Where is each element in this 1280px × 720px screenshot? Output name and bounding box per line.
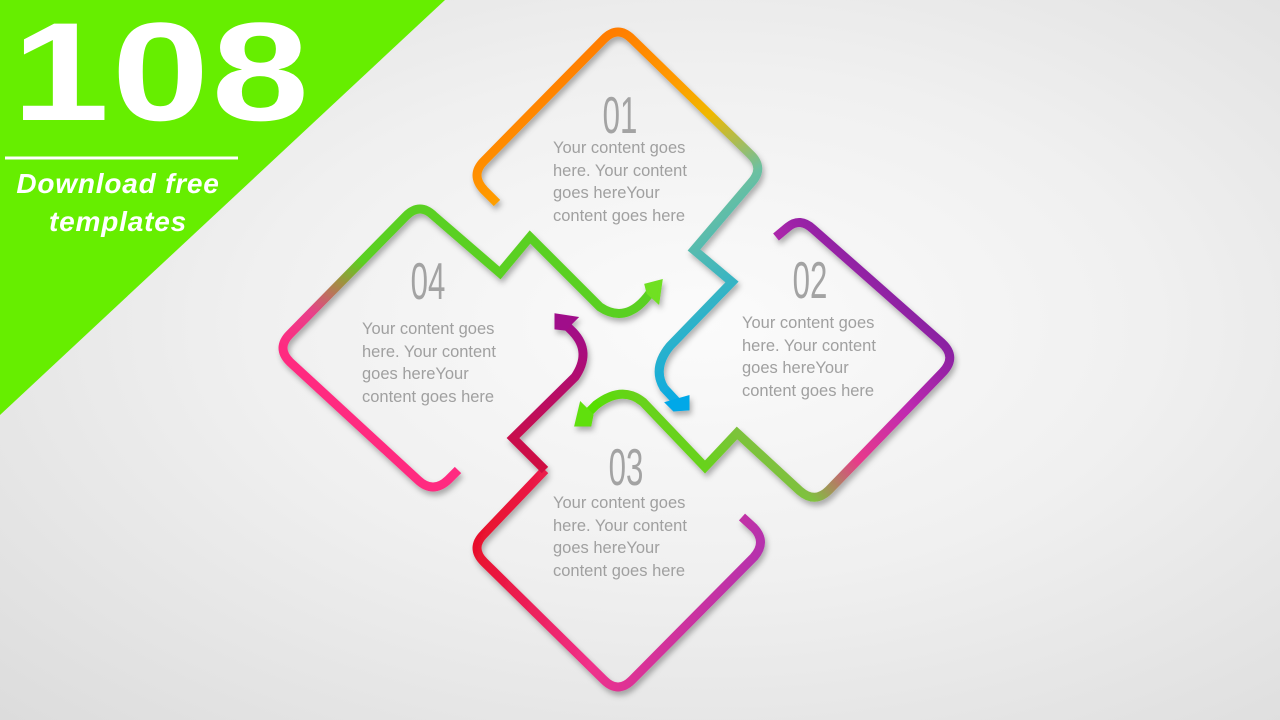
text 03: here. Your content	[553, 517, 687, 535]
text 02: content goes here	[742, 382, 874, 400]
text 01	[553, 139, 687, 225]
text 02	[742, 314, 876, 400]
text 02: here. Your content	[742, 337, 876, 355]
text 03: Your content goes	[553, 494, 685, 512]
banner	[0, 0, 445, 415]
text 04: content goes here	[362, 388, 494, 406]
text 01: goes hereYour	[553, 184, 660, 202]
text 01: here. Your content	[553, 162, 687, 180]
number 03: 03	[609, 439, 643, 497]
shape 2	[576, 222, 950, 497]
banner text	[16, 168, 220, 237]
text 04: Your content goes	[362, 320, 494, 338]
banner text: Download free	[16, 168, 220, 199]
text 01: content goes here	[553, 207, 685, 225]
text 02: goes hereYour	[742, 359, 849, 377]
banner text: templates	[49, 206, 187, 237]
text 01: Your content goes	[553, 139, 685, 157]
text 04	[362, 320, 496, 406]
text 03: goes hereYour	[553, 539, 660, 557]
number 01: 01	[603, 87, 637, 145]
shape 3	[477, 315, 760, 687]
shape 4	[283, 209, 661, 487]
shape 1	[477, 32, 758, 410]
number 04: 04	[411, 253, 445, 311]
text 02: Your content goes	[742, 314, 874, 332]
text 04: goes hereYour	[362, 365, 469, 383]
text 04: here. Your content	[362, 343, 496, 361]
text 03: content goes here	[553, 562, 685, 580]
text 03	[553, 494, 687, 580]
number 02: 02	[793, 252, 827, 310]
